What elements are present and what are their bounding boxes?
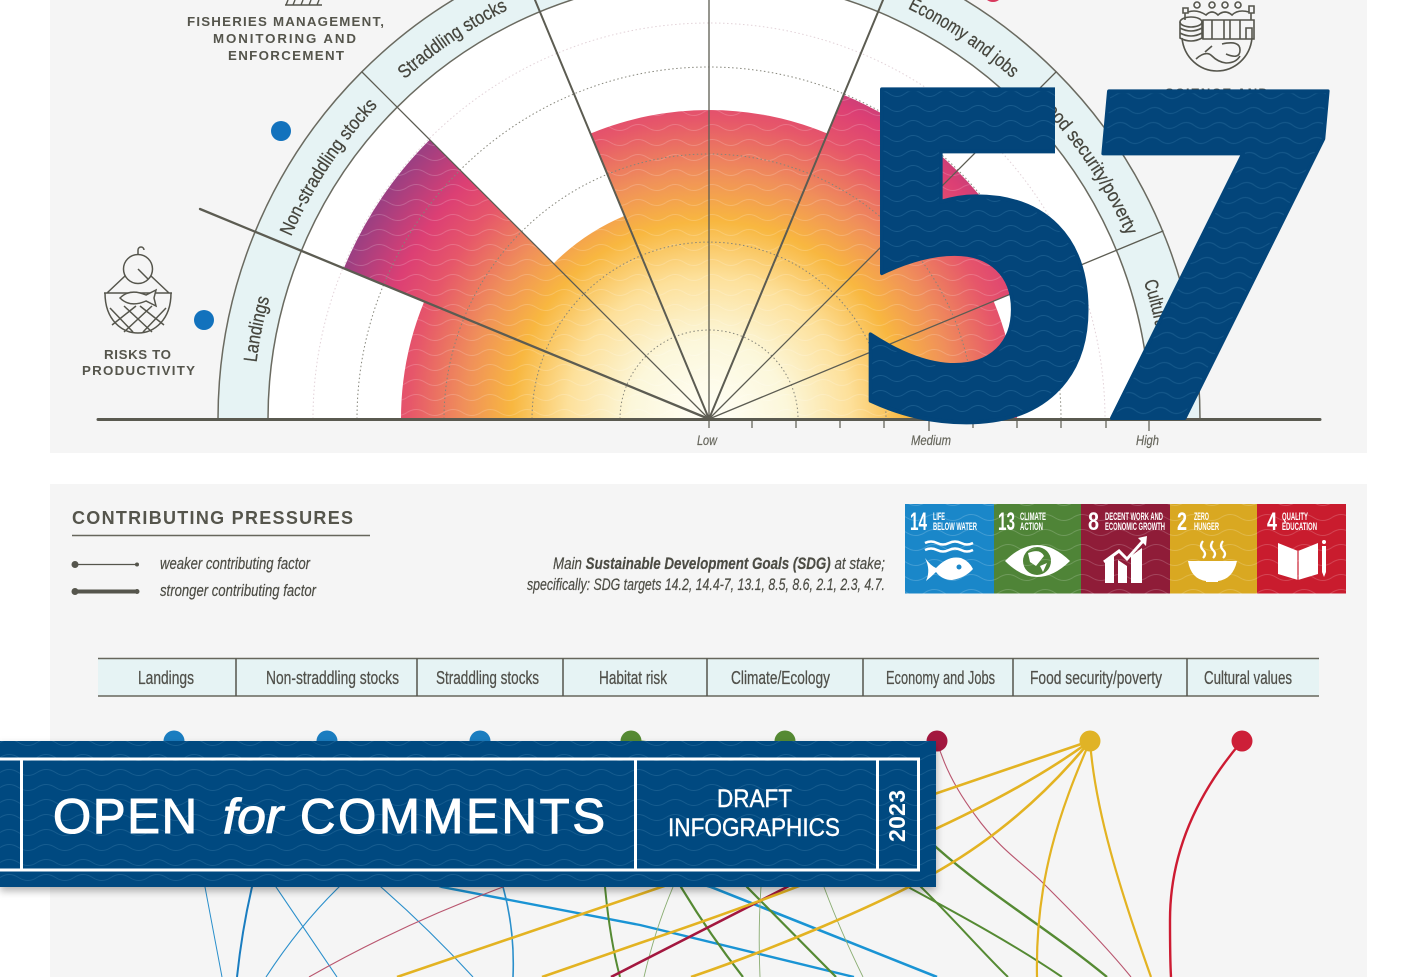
SDG 4 quality education: EDUCATION xyxy=(1282,521,1317,533)
SDG 8 decent work: 8 xyxy=(1088,508,1099,536)
banner frame xyxy=(0,759,918,870)
table header: categories: Economy and Jobs xyxy=(886,668,995,688)
axis labels: Low xyxy=(697,432,718,448)
icon: fisheries management (cropped) xyxy=(285,0,322,5)
icon: fish in net with clock xyxy=(104,247,172,333)
yellow links xyxy=(397,741,1151,977)
category nodes xyxy=(164,730,1252,752)
axis labels: High xyxy=(1136,432,1159,448)
banner title xyxy=(53,790,605,844)
SDG 8 decent work xyxy=(1081,504,1170,594)
band labels: Cultural values xyxy=(1145,280,1164,326)
axis ticks xyxy=(709,420,1149,431)
heading: contributing pressures: CONTRIBUTING PRESSURES xyxy=(72,508,353,528)
large number 57: 5 xyxy=(840,0,1114,522)
SDG 2 zero hunger xyxy=(1170,504,1257,594)
dotted scale rings xyxy=(313,23,1105,419)
panel: contributing pressures xyxy=(50,484,1367,977)
table header: categories: Cultural values xyxy=(1204,668,1292,688)
banner: open for comments xyxy=(0,741,936,887)
outer label band xyxy=(218,0,1200,419)
table header: categories: Food security/poverty xyxy=(1030,668,1162,688)
table header: categories: Habitat risk xyxy=(599,668,668,688)
SDG 14 life below water: 14 xyxy=(910,508,927,536)
SDG 4 quality education: 4 xyxy=(1267,508,1277,536)
axis labels xyxy=(697,432,1159,448)
red link xyxy=(1170,741,1242,977)
SDG 13 climate action: ACTION xyxy=(1020,521,1043,533)
SDG 4 quality education: QUALITY xyxy=(1282,511,1308,523)
SDG 13 climate action xyxy=(994,504,1081,594)
SDG 8 decent work: DECENT WORK AND xyxy=(1105,511,1163,523)
table header: categories: Climate/Ecology xyxy=(731,668,830,688)
table header: categories: Straddling stocks xyxy=(436,668,539,688)
blue links xyxy=(174,741,937,977)
heading: risks to productivity xyxy=(82,347,195,378)
SDG tiles xyxy=(905,504,1346,594)
legend: contributing factor line weights xyxy=(72,554,317,600)
heading: fisheries management: MONITORING AND xyxy=(213,31,356,46)
SDG 2 zero hunger: HUNGER xyxy=(1194,521,1219,533)
SDG 14 life below water: BELOW WATER xyxy=(933,521,977,533)
heading: risks to productivity: PRODUCTIVITY xyxy=(82,363,195,378)
spokes xyxy=(200,0,1163,419)
dot: landings pressure marker xyxy=(194,310,214,330)
table header: categories: Non-straddling stocks xyxy=(266,668,399,688)
table header: categories xyxy=(98,658,1319,696)
band labels xyxy=(244,0,1164,362)
large number 57 xyxy=(868,87,1330,424)
banner title: for xyxy=(223,790,285,844)
axis baseline xyxy=(98,418,1320,421)
heading: science (hidden behind number): SCIENCE AND xyxy=(1165,86,1268,100)
text: main SDGs at stake: Main Sustainable Development Goals (SDG) at stake; xyxy=(553,554,885,573)
text: main SDGs at stake: specifically: SDG targets 14.2, 14.4-7, 13.1, 8.5, 8.6, 2.1, 2.3, 4.7. xyxy=(527,575,885,594)
banner title: OPEN xyxy=(53,790,197,844)
heading: fisheries management: ENFORCEMENT xyxy=(228,48,344,63)
band labels: Food security/poverty xyxy=(1055,106,1136,233)
SDG 4 quality education xyxy=(1257,504,1346,594)
axis labels: Medium xyxy=(911,432,951,448)
banner subtitle: DRAFT xyxy=(717,785,792,813)
heading: fisheries management: FISHERIES MANAGEMENT, xyxy=(187,14,384,29)
heading: fisheries management xyxy=(187,14,384,63)
banner title: COMMENTS xyxy=(300,790,605,844)
text: main SDGs at stake xyxy=(527,554,885,594)
SDG 2 zero hunger: 2 xyxy=(1177,508,1187,536)
banner subtitle: INFOGRAPHICS xyxy=(668,814,840,842)
heading: risks to productivity: RISKS TO xyxy=(104,347,171,362)
SDG 2 zero hunger: ZERO xyxy=(1194,511,1209,523)
banner subtitle xyxy=(668,785,840,842)
banner year: 2023 xyxy=(884,790,910,842)
legend: contributing factor line weights: stronger contributing factor xyxy=(160,581,317,600)
SDG 13 climate action: 13 xyxy=(998,508,1015,536)
panel: radial risk chart background xyxy=(50,0,1367,453)
dot: non-straddling pressure marker xyxy=(271,121,291,141)
crimson links xyxy=(309,741,1131,977)
band labels: Non-straddling stocks xyxy=(280,100,376,236)
icon: science and globe xyxy=(1180,2,1254,71)
chart: network of contributing pressures xyxy=(164,730,1252,977)
table header: categories: Landings xyxy=(138,668,194,688)
green links xyxy=(605,741,1107,977)
SDG 14 life below water: LIFE xyxy=(933,511,945,523)
band labels: Landings xyxy=(244,296,270,362)
SDG 13 climate action: CLIMATE xyxy=(1020,511,1046,523)
risk wedges xyxy=(344,95,1033,419)
SDG 8 decent work: ECONOMIC GROWTH xyxy=(1105,521,1165,533)
SDG 14 life below water xyxy=(905,504,994,594)
inner white disc xyxy=(268,0,1150,419)
large number 57: 7 xyxy=(1043,3,1368,524)
legend: contributing factor line weights: weaker contributing factor xyxy=(160,554,311,573)
chart: radial risk semicircle xyxy=(96,0,1322,448)
dot: top pink marker xyxy=(983,0,1003,2)
